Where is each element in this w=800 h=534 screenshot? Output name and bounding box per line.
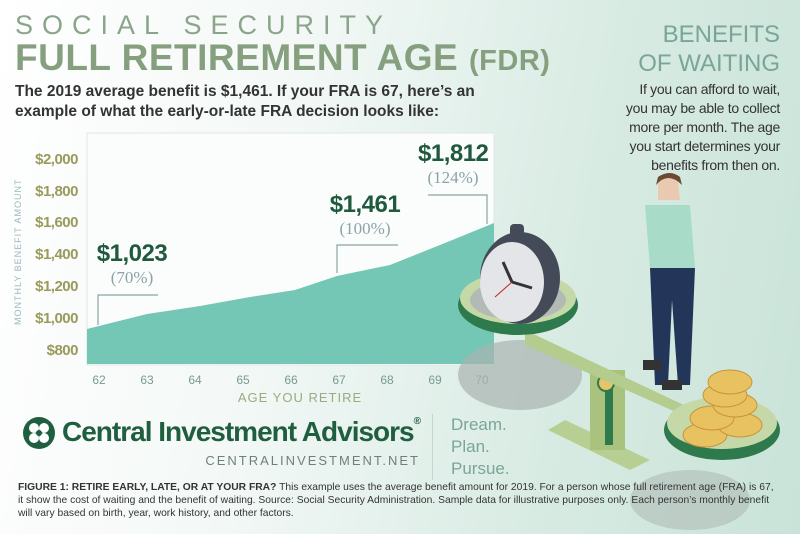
heading: benefits of waiting bbox=[638, 21, 780, 77]
callout: 1812: $1,812 bbox=[418, 140, 488, 167]
text: benefits description: you may be able to collect bbox=[626, 100, 780, 116]
title: FULL RETIREMENT AGE (FDR) bbox=[15, 37, 550, 78]
x axis labels: 67 bbox=[332, 373, 346, 387]
icon: clover bbox=[23, 417, 55, 449]
tagline bbox=[432, 414, 551, 480]
callout: 1812: (124%) bbox=[428, 168, 478, 187]
callout: 1023 bbox=[97, 240, 167, 287]
x axis labels bbox=[92, 373, 489, 405]
text: benefits description: If you can afford to wait, bbox=[639, 81, 780, 97]
x axis labels: 70 bbox=[475, 373, 489, 387]
callout: 1812 bbox=[418, 140, 488, 187]
text: benefits description bbox=[626, 81, 780, 173]
x axis labels: AGE YOU RETIRE bbox=[238, 390, 362, 405]
x axis labels: 66 bbox=[284, 373, 298, 387]
tagline: Plan. bbox=[451, 437, 490, 456]
heading: benefits of waiting: BENEFITS bbox=[663, 21, 780, 48]
callout: 1023: $1,023 bbox=[97, 240, 167, 267]
tagline: Pursue. bbox=[451, 459, 510, 478]
callout: 1461: (100%) bbox=[340, 219, 390, 238]
y axis labels: $800 bbox=[47, 342, 78, 359]
text: benefits description: more per month. The age bbox=[629, 119, 780, 135]
y axis labels: $2,000 bbox=[35, 151, 78, 168]
callout: 1461 bbox=[330, 191, 400, 238]
x axis labels: 69 bbox=[428, 373, 442, 387]
website: CENTRALINVESTMENT.NET bbox=[205, 453, 420, 468]
title: SOCIAL SECURITY bbox=[15, 10, 392, 40]
y axis labels bbox=[35, 151, 78, 359]
y axis labels: $1,200 bbox=[35, 278, 78, 295]
x axis labels: 68 bbox=[380, 373, 394, 387]
tagline: Dream. bbox=[451, 415, 507, 434]
callout: 1023: (70%) bbox=[111, 268, 153, 287]
x axis labels: 65 bbox=[236, 373, 250, 387]
heading: benefits of waiting: OF WAITING bbox=[638, 50, 780, 77]
subtitle text: The 2019 average benefit is $1,461. If your FRA is 67, here’s an example of what the early-or-late FRA decision looks like: bbox=[15, 83, 475, 120]
logo: Central Investment Advisors: Central Investment Advisors® bbox=[62, 416, 420, 447]
y axis labels: $1,400 bbox=[35, 246, 78, 263]
y axis labels: $1,600 bbox=[35, 214, 78, 231]
y axis title: MONTHLY BENEFIT AMOUNT bbox=[13, 178, 23, 325]
callout: 1461: $1,461 bbox=[330, 191, 400, 218]
x axis labels: 62 bbox=[92, 373, 106, 387]
title bbox=[15, 10, 550, 78]
footnote: FIGURE 1: RETIRE EARLY, LATE, OR AT YOUR FRA? This example uses the average benefit amount for 2019. For a person whose full retirement age (FRA) is 67, it show the cost of waiting and the benefit of waiting. Source: Social Security Administration. Sample data for illustrative purposes only. Each person’s monthly benefit will vary based on birth, year, work history, and other factors. bbox=[18, 482, 774, 519]
y axis labels: $1,000 bbox=[35, 310, 78, 327]
y axis labels: $1,800 bbox=[35, 183, 78, 200]
x axis labels: 63 bbox=[140, 373, 154, 387]
text: benefits description: you start determines your bbox=[630, 138, 780, 154]
x axis labels: 64 bbox=[188, 373, 202, 387]
text: benefits description: benefits from then on. bbox=[651, 157, 780, 173]
